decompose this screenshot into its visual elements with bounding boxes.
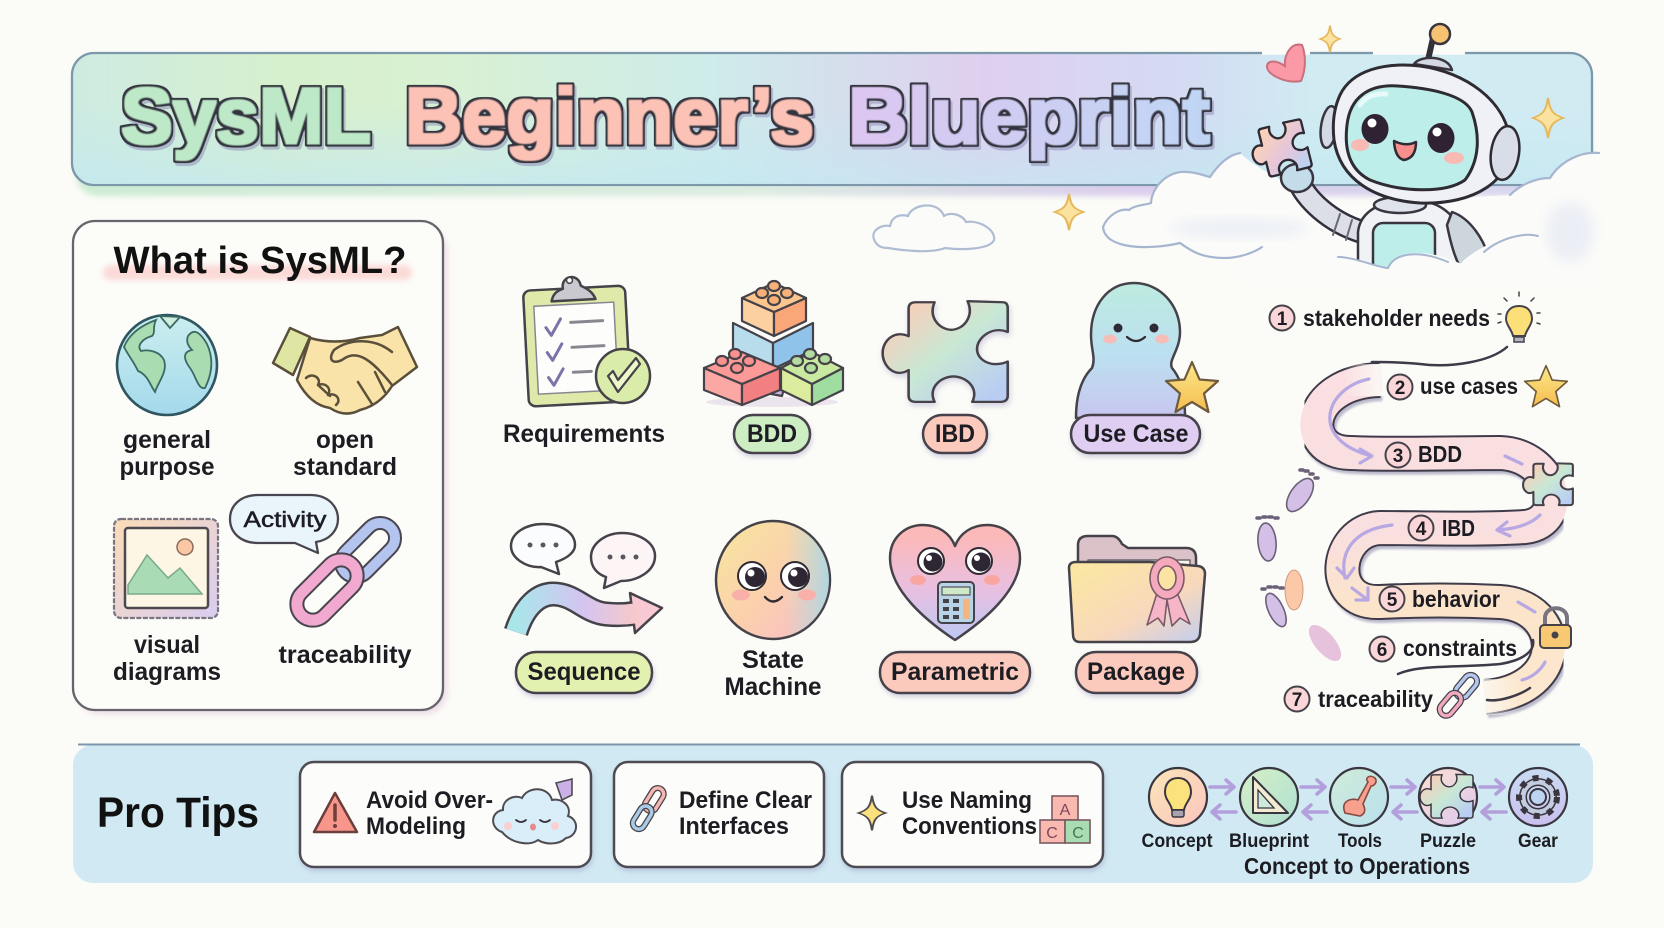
icon: puzzle [1419,768,1477,826]
label: requirements: Requirements [503,420,665,448]
label: state machine: State [742,646,804,674]
diagram: sequence [511,524,662,693]
flow labels: Puzzle [1420,830,1476,852]
text: define clear interfaces: Interfaces [679,813,789,840]
step 3: BDD: BDD [1418,441,1462,467]
label: visual diagrams: visual [134,631,200,659]
text: avoid over-modeling: Modeling [366,813,466,840]
step 3: BDD: 3 [1393,446,1403,467]
diagram: IBD [883,301,1008,453]
card: use naming conventions [842,762,1103,867]
icon: handshake [273,327,417,414]
icon: person [1076,283,1185,418]
connector lines [1372,347,1533,700]
icon: wavy arrow [516,593,662,633]
flow labels: Blueprint [1229,830,1309,852]
heading highlight [103,265,412,280]
speech bubble: activity [230,495,338,553]
icon: road puzzle [1523,463,1573,505]
text: use naming conventions: Conventions [902,813,1037,840]
step 5: behavior [1380,586,1500,612]
step 2: use cases: use cases [1420,373,1518,399]
diagram: state machine [716,521,830,701]
speech bubble: activity: Activity [244,507,326,532]
pill: use case: Use Case [1084,420,1189,448]
step 7: traceability: 7 [1292,690,1302,711]
icon: picture stamp [114,519,218,618]
step 4: IBD: IBD [1442,515,1475,541]
label: general purpose: purpose [120,453,215,481]
panel: what is SysML [73,221,447,714]
title: Blueprint [848,71,1210,160]
diagram: use case [1071,283,1218,453]
step 1: stakeholder needs: 1 [1277,309,1288,330]
text: use naming conventions [902,787,1037,840]
pill: package: Package [1087,658,1185,686]
icon: heart [1267,45,1305,82]
pill: BDD [734,415,810,453]
icon: building blocks [704,281,843,407]
step 3: BDD [1386,441,1462,468]
diagram: requirements [503,274,665,448]
icon: smiling face [716,521,830,639]
icon: sparkle top [1320,26,1340,52]
cloud in front of robot [1285,235,1560,285]
label: open standard [293,426,397,481]
icon: tools [1330,768,1388,826]
card: define clear interfaces [614,762,824,867]
text: define clear interfaces: Define Clear [679,787,812,814]
title [121,71,1210,160]
flow: concept to operations [1142,768,1567,879]
icon: light bulb [1498,292,1540,342]
flow labels: Concept [1142,830,1213,852]
flow labels [1142,830,1558,852]
step 4: IBD: 4 [1416,519,1427,540]
icon: small chain [1437,672,1480,718]
step 7: traceability: traceability [1318,686,1433,712]
label: open standard: standard [293,453,397,481]
icon: speech bubble left [511,524,575,574]
label: visual diagrams: diagrams [113,658,221,686]
icon: clipboard [522,274,631,407]
title: SysML [121,71,371,160]
pill: parametric: Parametric [891,658,1019,686]
small cloud [873,205,994,251]
robot [1247,24,1523,280]
diagram: package [1069,536,1205,693]
card: avoid over-modeling [300,762,591,867]
pill: package [1076,652,1197,693]
icon: sparkle mid [1055,194,1083,230]
icon: heart with calculator [890,525,1020,640]
label: visual diagrams [113,631,221,686]
pill: use case [1071,415,1200,453]
step 2: use cases [1388,373,1518,400]
icon: footprints [1256,470,1347,666]
panel: pro tips band [73,744,1593,883]
label: traceability: traceability [278,641,412,669]
icon: sparkle right [1533,98,1563,138]
icon: blueprint set square [1240,768,1298,826]
heart and sparkles [1055,26,1563,230]
icon: lock [1540,608,1571,648]
heading: what is SysML: What is SysML? [114,240,406,282]
label: general purpose [120,426,215,481]
label: general purpose: general [123,426,211,454]
icon: check badge [596,349,650,403]
diagram: parametric [880,525,1030,693]
icon: chain links [290,517,401,627]
label: state machine [724,646,822,701]
flow labels: Tools [1338,830,1382,852]
text: avoid over-modeling [366,787,493,840]
step 5: behavior: behavior [1412,586,1500,612]
step 2: use cases: 2 [1395,378,1405,399]
step 5: behavior: 5 [1387,590,1398,611]
icon: alphabet blocks: C [1046,825,1058,842]
step 1: stakeholder needs: stakeholder needs [1303,305,1490,331]
direction arrows [1330,379,1545,680]
flow arrows [1210,780,1506,819]
text: use naming conventions: Use Naming [902,787,1032,814]
text: avoid over-modeling: Avoid Over- [366,787,493,814]
label: state machine: Machine [724,673,822,701]
diagram: BDD [704,281,843,453]
step 6: constraints: 6 [1377,640,1387,661]
icon: gear [1509,768,1567,826]
pill: parametric [880,652,1030,693]
icon: warning triangle [314,793,357,832]
step 6: constraints: constraints [1403,635,1517,661]
icon: alphabet blocks [1040,796,1090,843]
pill: IBD: IBD [935,420,975,448]
roadmap: winding path [1316,347,1551,715]
step 4: IBD [1408,515,1475,541]
icon: concept bulb [1149,768,1207,826]
icon: sleepy cloud [493,779,576,844]
icon: puzzle piece [883,301,1008,402]
pill: sequence: Sequence [528,658,641,686]
icon: sparkle [858,796,886,830]
icon: alphabet blocks: A [1060,802,1071,819]
text: define clear interfaces [679,787,812,840]
icon: folder with ribbon [1069,536,1205,642]
icon: speech bubble right [591,533,655,588]
icon: alphabet blocks: C [1072,825,1084,842]
heading: pro tips: Pro Tips [97,789,259,837]
pill: IBD [923,415,987,453]
flow caption: Concept to Operations [1244,853,1470,879]
label: open standard: open [316,426,374,454]
pill: BDD: BDD [747,420,797,448]
icon: star [1166,362,1218,412]
header banner [72,53,1592,196]
icon: chain [631,786,666,831]
title: Beginner’s [405,71,814,160]
icon: globe [117,315,217,415]
icon: road star [1525,366,1567,407]
cloud behind robot [1103,153,1602,285]
pill: sequence [516,652,652,693]
flow labels: Gear [1518,830,1558,852]
